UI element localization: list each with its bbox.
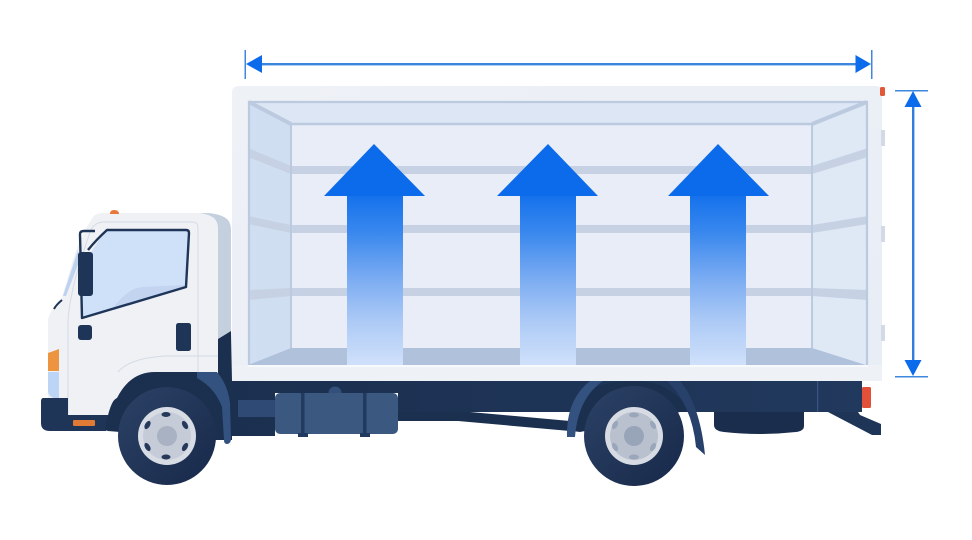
- rear wheel: [584, 386, 684, 486]
- lower mirror: [78, 325, 92, 340]
- spare wheel: [714, 412, 804, 434]
- width dimension arrow: [244, 50, 872, 79]
- ceiling: [248, 101, 868, 124]
- front wheel: [118, 387, 216, 485]
- left wall: [248, 101, 291, 365]
- upward arrow 1: [324, 144, 425, 365]
- rear wheel arch: [572, 381, 690, 432]
- interior rails: [248, 148, 868, 300]
- upward arrow 3: [668, 144, 769, 365]
- box outer shell: [232, 86, 882, 381]
- interior frame lines: [249, 102, 867, 365]
- chassis rail: [218, 381, 862, 436]
- height dimension arrow: [895, 90, 928, 378]
- dark cab gap: [218, 331, 232, 381]
- front wheel arch: [105, 372, 232, 440]
- windshield sliver: [63, 250, 79, 296]
- front bumper: [41, 398, 110, 431]
- chassis bar: [238, 400, 276, 417]
- upward arrow 2: [497, 144, 598, 365]
- truck cab: [41, 210, 232, 431]
- door handle: [176, 323, 191, 351]
- cargo box: [218, 86, 885, 436]
- lower chassis strut: [398, 412, 570, 431]
- box interior: [248, 101, 868, 365]
- roof marker: [110, 210, 119, 214]
- bumper reflector: [73, 420, 95, 426]
- fuel tank: [275, 386, 398, 437]
- rear underrun bracket: [828, 412, 881, 435]
- side window: [80, 230, 189, 318]
- blue headlamp: [48, 372, 59, 398]
- door outline: [68, 222, 218, 415]
- cab body: [48, 213, 218, 415]
- rear door hinges: [881, 130, 885, 341]
- orange headlamp: [48, 349, 59, 371]
- mirror: [78, 252, 93, 296]
- rear marker light: [880, 87, 885, 96]
- rear tail light: [862, 387, 871, 408]
- cab rear panel: [200, 213, 231, 372]
- front fender: [197, 372, 231, 444]
- right wall: [812, 101, 868, 365]
- rear fender: [567, 381, 705, 455]
- floor: [248, 348, 866, 365]
